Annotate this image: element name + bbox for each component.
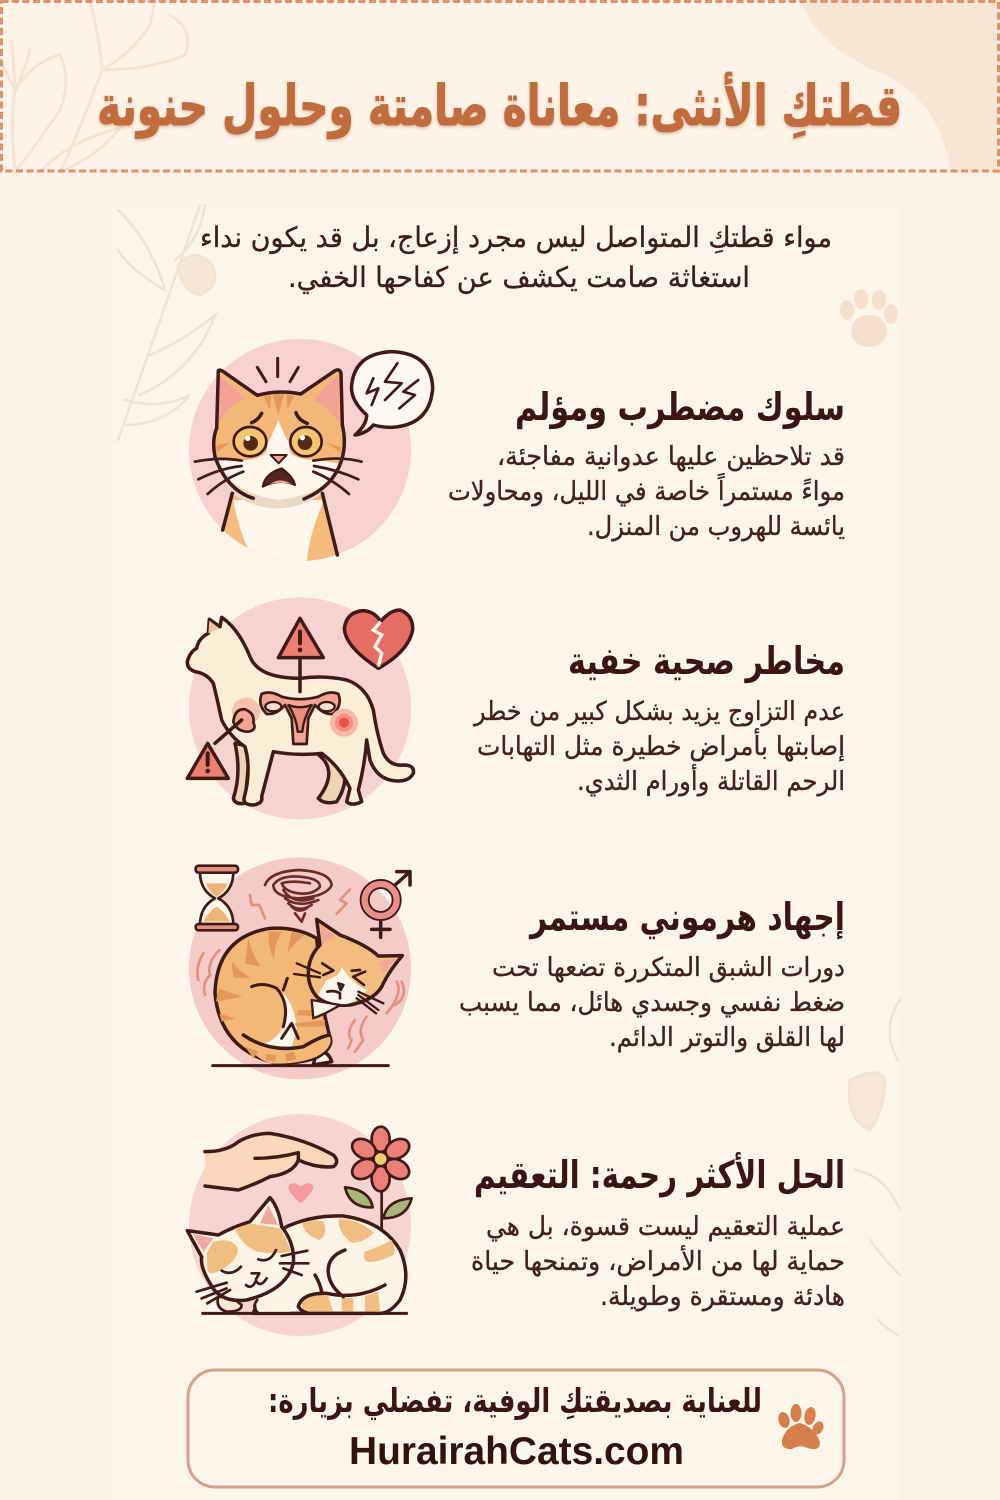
text block: health risks: مخاطر صحية خفية: [568, 639, 845, 683]
background panel: [113, 205, 900, 1500]
text block: hormonal stress: [459, 895, 845, 1053]
text block: behaviour: مواءً مستمراً خاصة في الليل، ومحاولات: [448, 472, 845, 507]
paw: [313, 1051, 332, 1065]
text block: spaying solution: الحل الأكثر رحمة: التعقيم: [474, 1151, 845, 1198]
background paw: [840, 289, 898, 347]
tail: [301, 1292, 380, 1312]
text block: behaviour: قد تلاحظين عليها عدوانية مفاجئة،: [497, 442, 845, 472]
text block: hormonal stress: لها القلق والتوتر الدائم.: [609, 1023, 845, 1053]
cat body: [187, 617, 414, 805]
zigzags: [197, 889, 404, 1052]
text block: health risks: عدم التزاوج يزيد بشكل كبير من خطر: [472, 697, 845, 727]
back legs: [233, 743, 345, 804]
warning triangles: [278, 618, 323, 658]
footer text arabic: للعناية بصديقتكِ الوفية، تفضلي بزيارة:: [268, 1381, 762, 1421]
text block: hormonal stress: إجهاد هرموني مستمر: [528, 895, 845, 940]
icon: cat anatomy health risks: [187, 597, 414, 819]
cat body: [215, 928, 331, 1063]
background floral right lower: [849, 1000, 900, 1335]
footer website: HurairahCats.com: [349, 1430, 684, 1473]
cat head: [308, 919, 402, 1005]
flower: [345, 1127, 413, 1230]
header floral decoration: [0, 0, 188, 172]
text block: spaying solution: حماية لها من الأمراض، وتمنحها حياة: [471, 1244, 845, 1277]
icon: stressed cat: [189, 857, 411, 1079]
text block: hormonal stress: ضغط نفسي وجسدي هائل، مما يسبب: [459, 988, 845, 1018]
cat body: [253, 1216, 406, 1313]
text block: health risks: [472, 639, 845, 797]
background floral left: [118, 205, 215, 440]
footer call to action: [188, 1370, 844, 1487]
paws: [218, 1297, 242, 1312]
tornado: [265, 870, 332, 922]
intro text: [200, 221, 832, 294]
speech bubble: [352, 352, 433, 435]
lump: [232, 698, 260, 726]
text block: hormonal stress: دورات الشبق المتكررة تضعها تحت: [492, 953, 845, 983]
header band: [0, 0, 1000, 172]
cat head: [187, 1198, 294, 1300]
gender symbol: [365, 872, 410, 937]
text block: spaying solution: [471, 1151, 845, 1312]
intro text: مواء قطتكِ المتواصل ليس مجرد إزعاج، بل قد يكون نداء: [200, 221, 832, 255]
icon: sleeping cat and hand: [187, 1114, 413, 1336]
text block: health risks: إصابتها بأمراض خطيرة مثل التهابات: [477, 727, 845, 762]
hand: [205, 1133, 337, 1190]
cat head: [214, 370, 344, 500]
tail: [243, 1035, 331, 1064]
text block: spaying solution: هادئة ومستقرة وطويلة.: [600, 1282, 845, 1312]
ground: [213, 1061, 388, 1070]
hourglass: [196, 866, 238, 930]
intro text: استغاثة صامت يكشف عن كفاحها الخفي.: [288, 261, 750, 294]
text block: behaviour: يائسة للهروب من المنزل.: [587, 512, 845, 542]
text block: spaying solution: عملية التعقيم ليست قسوة، بل هي: [486, 1212, 845, 1242]
text block: behaviour: [448, 385, 845, 542]
hot spot: [330, 709, 358, 737]
icon: startled cat: [189, 339, 433, 565]
icon: footer paw: [777, 1404, 826, 1449]
heart: [288, 1183, 313, 1203]
broken heart: [344, 610, 413, 668]
text block: behaviour: سلوك مضطرب ومؤلم: [515, 385, 845, 430]
uterus: [260, 692, 340, 744]
ground: [203, 1309, 407, 1318]
text block: health risks: الرحم القاتلة وأورام الثدي.: [577, 763, 845, 797]
